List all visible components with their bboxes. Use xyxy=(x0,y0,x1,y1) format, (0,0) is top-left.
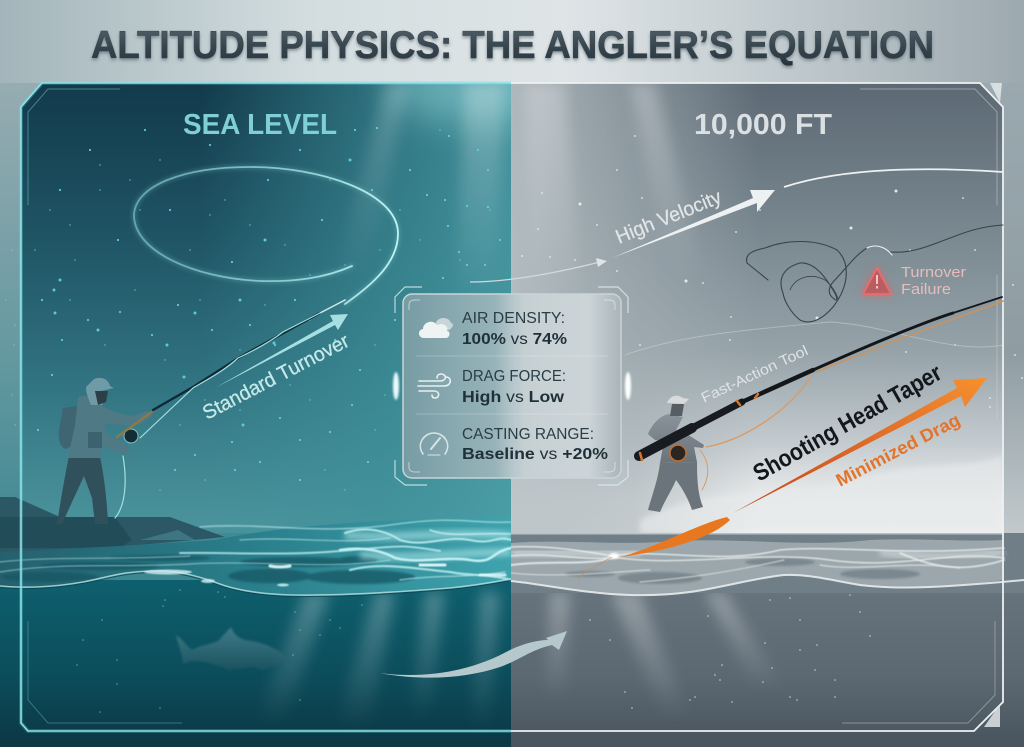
fish xyxy=(176,627,287,670)
label: turnover failure: Turnover xyxy=(901,264,966,281)
bubbles right xyxy=(590,595,870,708)
wave line left xyxy=(0,571,511,596)
row: drag force: DRAG FORCE: xyxy=(462,368,566,385)
arrow: standard turnover xyxy=(215,314,348,388)
panel: sea level xyxy=(0,83,511,580)
shooting head xyxy=(620,517,730,557)
bubbles left xyxy=(77,590,362,712)
label: turnover failure: Failure xyxy=(901,281,951,298)
panel: 10,000 ft xyxy=(511,83,1024,533)
row: casting range xyxy=(462,426,608,463)
label: fast-action tool: Fast-Action Tool xyxy=(699,343,811,407)
card glow brackets xyxy=(395,287,628,485)
light rays right xyxy=(544,593,765,696)
stars: left sky xyxy=(6,128,500,490)
icon: turnover failure warning xyxy=(863,268,891,294)
row: air density: 100% vs 74% xyxy=(462,331,567,348)
hood xyxy=(670,404,684,416)
heading: sea level: SEA LEVEL xyxy=(183,109,337,141)
row: drag force: High vs Low xyxy=(462,389,565,406)
caustics right xyxy=(511,547,1004,582)
arrow: underwater curve xyxy=(379,631,567,678)
rod cast loop line xyxy=(134,167,398,304)
reel xyxy=(124,429,138,443)
soft light on the water xyxy=(345,534,511,557)
row: casting range: Baseline vs +20% xyxy=(462,446,608,463)
label: turnover failure xyxy=(901,264,966,298)
rod: fast-action tool xyxy=(639,297,1003,490)
row: air density xyxy=(462,310,567,348)
torso and arm xyxy=(68,396,152,458)
title: ALTITUDE PHYSICS: THE ANGLER’S EQUATION xyxy=(91,24,934,67)
heading: 10,000 ft: 10,000 FT xyxy=(694,109,832,141)
wave line right xyxy=(511,575,1024,595)
label: minimized drag: Minimized Drag xyxy=(833,410,963,491)
stars: right sky xyxy=(522,136,1022,407)
light rays left xyxy=(269,586,506,711)
label: shooting head taper: Shooting Head Taper xyxy=(749,359,946,487)
panel: comparison card xyxy=(393,287,631,485)
arrow: shooting head taper xyxy=(620,378,987,557)
row: casting range: CASTING RANGE: xyxy=(462,426,594,443)
head xyxy=(86,378,114,405)
legs xyxy=(648,462,703,512)
rod and line: sea level xyxy=(115,300,345,518)
icon: wind xyxy=(418,374,450,398)
caustics left xyxy=(0,520,511,580)
arrow: high velocity xyxy=(612,190,775,258)
icon: cloud xyxy=(419,318,453,338)
underwater: 10,000 ft xyxy=(511,580,1024,747)
row: drag force xyxy=(462,368,566,406)
corner triangles xyxy=(984,83,1002,727)
fisherman: sea level xyxy=(57,378,152,524)
foam xyxy=(144,570,289,586)
fisherman: 10,000 ft xyxy=(648,396,704,512)
label: high velocity: High Velocity xyxy=(613,186,725,249)
line: into right panel xyxy=(470,258,607,282)
tangled line xyxy=(747,225,1003,322)
water surface: sea level xyxy=(0,518,511,596)
sparkle xyxy=(578,553,619,580)
icon: gauge xyxy=(420,433,448,455)
shore rocks xyxy=(0,497,225,552)
water surface: 10,000 ft xyxy=(511,533,1024,595)
underwater: sea level xyxy=(0,580,511,747)
legs xyxy=(57,456,108,524)
line: top right xyxy=(784,169,1003,187)
soft light on the water right xyxy=(511,552,1004,557)
row: air density: AIR DENSITY: xyxy=(462,310,565,327)
backpack xyxy=(59,406,78,449)
torso xyxy=(648,414,704,463)
cap xyxy=(667,396,689,404)
label: standard turnover: Standard Turnover xyxy=(199,330,353,424)
vest pocket xyxy=(88,432,102,448)
faint line wave xyxy=(625,322,1003,355)
